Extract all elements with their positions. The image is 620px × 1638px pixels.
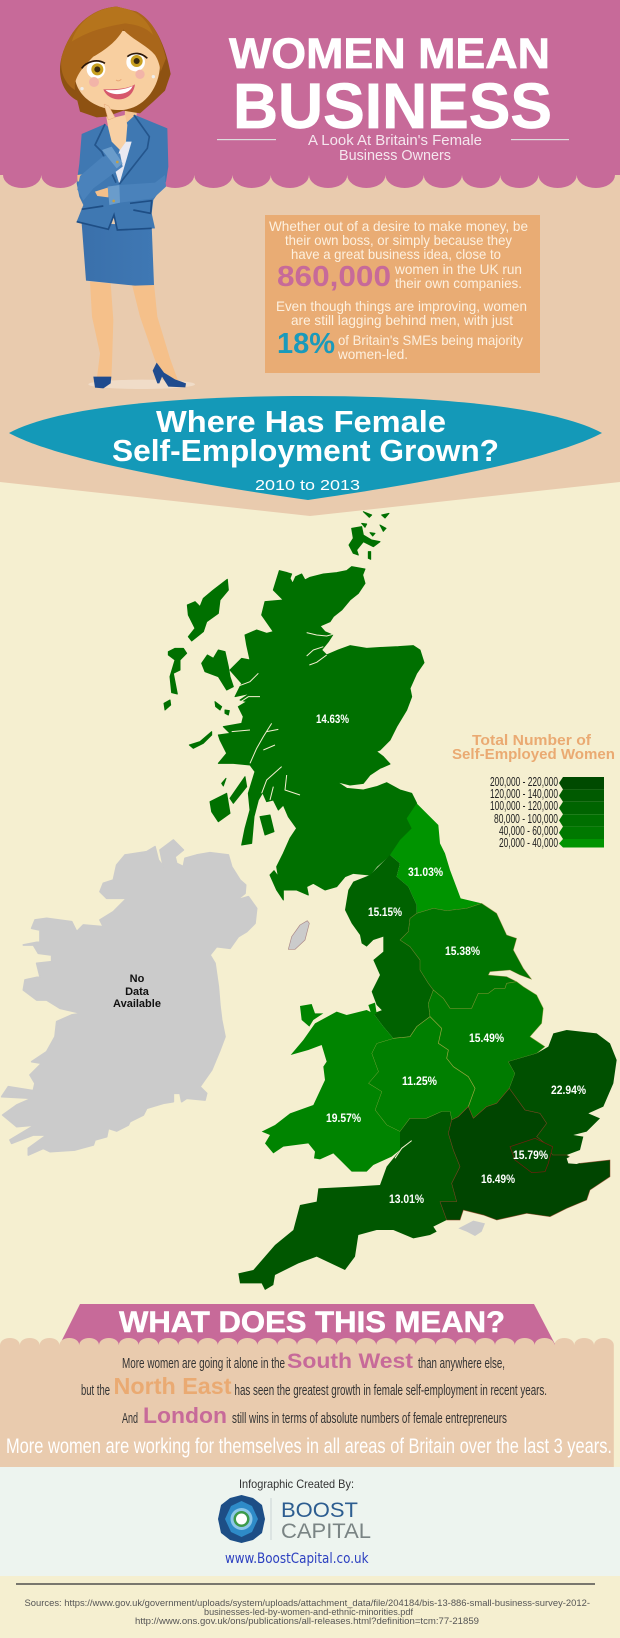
legend labels: 120,000 - 140,000	[490, 786, 558, 801]
heading: what does this mean	[59, 1304, 556, 1346]
stat: 860,000: 860,000	[277, 261, 391, 293]
legend labels: 80,000 - 100,000	[494, 811, 558, 826]
map percentage labels: 16.49%	[481, 1172, 515, 1186]
section heading banner: Self-Employment Grown?	[112, 433, 499, 468]
section heading banner	[9, 396, 602, 500]
map region: Scotland	[164, 512, 424, 900]
map: Ireland	[2, 840, 257, 1155]
region: South East	[440, 1088, 610, 1220]
header banner	[0, 0, 620, 188]
region: North West	[345, 855, 433, 1038]
legend title	[452, 732, 615, 763]
legend title: Self-Employed Women	[452, 746, 615, 763]
legend	[452, 732, 615, 850]
map percentage labels: 31.03%	[408, 865, 443, 879]
map percentage labels: 15.79%	[513, 1148, 548, 1162]
text: intro paragraph: Whether out of a desire to make money, be	[269, 218, 528, 234]
text: North East line: North East	[114, 1373, 232, 1399]
text: intro paragraph: women in the UK run	[394, 261, 522, 277]
map label: no data: No	[130, 973, 145, 985]
sources: http://www.ons.gov.uk/ons/publications/all-releases.html?definition=tcm:77-21859	[135, 1616, 479, 1627]
text: intro paragraph: have a great business idea, close to	[291, 246, 501, 262]
region: East of England	[508, 1030, 617, 1155]
text: South West line: than anywhere else,	[418, 1355, 505, 1372]
legend labels: 200,000 - 220,000	[490, 774, 558, 789]
panel: credit	[0, 1467, 620, 1576]
region: Wales	[262, 1003, 400, 1172]
map percentage labels: 14.63%	[316, 712, 349, 726]
map percentage labels: 19.57%	[326, 1111, 361, 1125]
legend labels: 100,000 - 120,000	[490, 798, 558, 813]
region: South West	[238, 1112, 460, 1290]
region: East Midlands	[428, 982, 545, 1118]
title	[229, 30, 552, 142]
text: London line: And	[122, 1410, 138, 1427]
text: London line: London	[143, 1403, 227, 1428]
map: England and Wales regions	[238, 803, 617, 1290]
legend title: Total Number of	[472, 732, 592, 749]
island: Isle of Wight	[458, 1221, 485, 1236]
map percentage labels: 13.01%	[389, 1192, 424, 1206]
legend swatches	[559, 777, 604, 848]
text: South West line	[122, 1350, 505, 1373]
map percentage labels	[316, 712, 586, 1206]
subtitle	[217, 132, 569, 164]
title: BUSINESS	[233, 70, 552, 142]
sources: businesses-led-by-women-and-ethnic-minorities.pdf	[204, 1607, 413, 1618]
region: Yorkshire	[400, 903, 532, 1008]
panel: credit: Infographic Created By:	[239, 1477, 354, 1491]
map label: no data	[113, 973, 161, 1010]
region: North East	[390, 803, 482, 913]
text: London line	[122, 1403, 507, 1428]
text: North East line: but the	[81, 1382, 110, 1399]
legend labels: 20,000 - 40,000	[499, 835, 558, 850]
island: Isle of Man	[288, 921, 309, 949]
text: South West line: More women are going it alone in the	[122, 1355, 285, 1372]
legend labels	[490, 774, 558, 850]
panel: intro facts	[265, 215, 540, 373]
map percentage labels: 22.94%	[551, 1083, 586, 1097]
icon: businesswoman illustration	[60, 7, 195, 389]
section heading banner: Where Has Female	[156, 404, 446, 439]
stat: 18%: 18%	[277, 328, 335, 360]
map label: no data: Data	[125, 986, 150, 998]
map percentage labels: 15.49%	[469, 1031, 504, 1045]
text: North East line	[81, 1373, 547, 1399]
panel: conclusions	[0, 1338, 614, 1467]
logo wordmark: CAPITAL	[281, 1520, 371, 1543]
text: intro paragraph: their own boss, or simply because they	[285, 232, 512, 248]
sources: Sources: https://www.gov.uk/government/uploads/system/uploads/attachment_data/file/204184/bis-13-886-small-business-survey-2012-	[24, 1598, 590, 1609]
text: intro paragraph	[269, 218, 528, 291]
logo wordmark	[281, 1499, 371, 1543]
text: lagging paragraph	[276, 298, 527, 362]
heading: what does this mean: WHAT DOES THIS MEAN?	[119, 1306, 505, 1339]
subtitle: A Look At Britain's Female	[308, 132, 482, 149]
text: lagging paragraph: are still lagging behind men, with just	[291, 312, 513, 328]
title: WOMEN MEAN	[229, 30, 550, 78]
logo wordmark: BOOST	[281, 1499, 358, 1522]
text: lagging paragraph: Even though things are improving, women	[276, 298, 527, 314]
map percentage labels: 15.15%	[368, 905, 402, 919]
text: South West line: South West	[287, 1350, 413, 1373]
region: West Midlands	[368, 1017, 475, 1132]
subtitle: Business Owners	[339, 147, 451, 164]
map percentage labels: 15.38%	[445, 944, 480, 958]
panel: credit: www.BoostCapital.co.uk	[225, 1551, 369, 1567]
section heading banner: 2010 to 2013	[255, 477, 360, 494]
map label: no data: Available	[113, 998, 161, 1010]
region: London	[510, 1138, 553, 1173]
sources	[24, 1598, 590, 1627]
icon: Boost Capital logo	[218, 1495, 265, 1543]
tan upper background	[0, 170, 620, 516]
legend labels: 40,000 - 60,000	[499, 823, 558, 838]
text: intro paragraph: their own companies.	[395, 275, 522, 291]
map percentage labels: 11.25%	[402, 1074, 437, 1088]
text: lagging paragraph: women-led.	[337, 346, 408, 362]
text: lagging paragraph: of Britain's SMEs being majority	[338, 332, 523, 348]
